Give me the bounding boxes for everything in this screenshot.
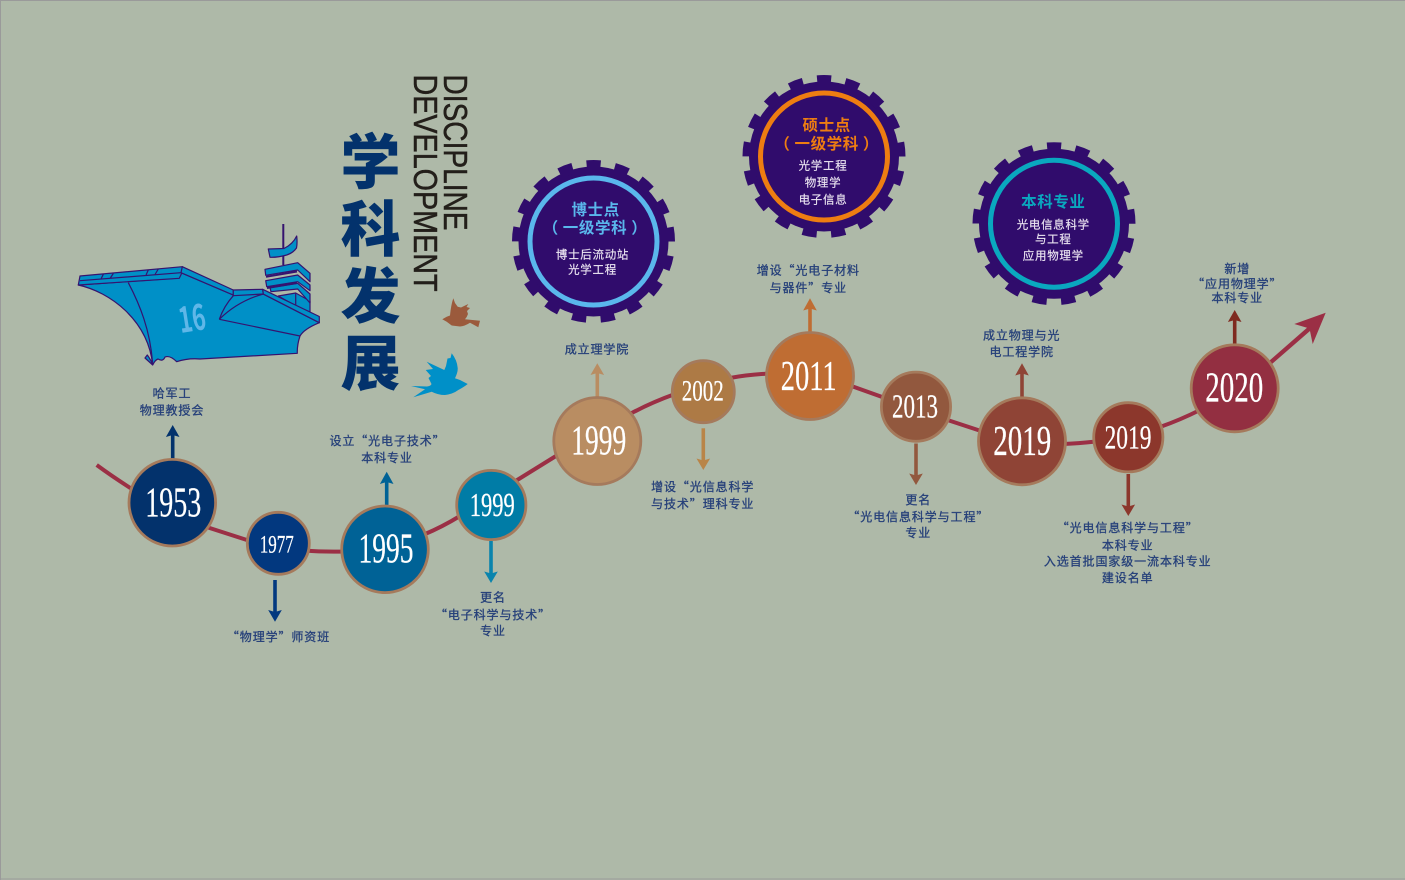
label: 1999 second: 成立理学院 [565,340,629,358]
title: Chinese [340,115,400,403]
arrow: 1995 [380,472,394,506]
title: Chinese: 科 [340,182,400,269]
node: 2002 [672,361,734,423]
label: 1999 [435,588,551,639]
arrow: 1953 [166,425,180,460]
node: 1953: 1953 [145,481,201,527]
gear: master: （ 一级学科 ） [774,132,879,154]
label: 2019 second: 建设名单 [1102,569,1154,586]
label: 2019: 电工程学院 [989,343,1054,360]
icon: blue bird [411,353,468,397]
label: 1999: 更名 [480,588,506,606]
label: 2019 second: “光电信息科学与工程” [1057,519,1199,536]
ship hull [78,273,319,365]
node: 1977 [247,512,309,574]
gear: doctoral: 博士点 [572,198,620,220]
node: 2019: 2019 [993,419,1051,465]
label: 2020 [1192,260,1282,306]
node: 2019 [978,398,1066,485]
label: 1977: “物理学”师资班 [227,628,330,645]
node: 2020: 2020 [1205,366,1263,412]
label: 2019 second: 本科专业 [1102,536,1154,554]
gear: master: 光学工程 [799,158,847,174]
node: 2013: 2013 [892,389,938,426]
ship deck [78,267,182,285]
arrow: 1977 [268,580,282,622]
node: 1999 second: 1999 [571,419,626,465]
label: 1995 [329,432,446,466]
node: 1953 [129,459,216,546]
arrow: 2002 [696,428,710,470]
node: 2020 [1191,345,1278,432]
arrow: 1999 second [590,363,604,397]
label: 2002: 与技术”理科专业 [651,495,754,512]
label: 2013 [847,491,989,541]
gear: doctoral: （ 一级学科 ） [543,216,647,238]
gear: doctoral: 光学工程 [568,262,617,278]
label: 2011: 增设“光电子材料 [757,262,860,278]
title: English line 2: DEVELOPMENT [407,74,444,292]
gear: undergraduate: 光电信息科学 [1017,216,1090,232]
label: 2020: 本科专业 [1211,289,1263,306]
node: 1999: 1999 [470,487,515,524]
node: 2013 [881,372,951,441]
gear: undergraduate: 与工程 [1035,231,1072,247]
label: 2013: 专业 [905,524,931,541]
arrow: 2019 second [1122,474,1135,516]
label: 1995: 本科专业 [361,449,413,466]
ship illustration [78,224,319,365]
title: English line 1: DISCIPLINE [437,74,474,230]
ship tower [265,263,310,312]
arrows [166,298,1241,622]
node: 1995 [342,506,428,593]
gear: master: 电子信息 [799,192,847,208]
label: 2002 [651,478,754,512]
title: Chinese: 发 [340,249,400,336]
node: 2011: 2011 [781,354,837,400]
label: 1999: 专业 [480,622,506,639]
label: 1953 [140,384,204,418]
label: 1999: “电子科学与技术” [435,606,551,623]
arrow: 2019 [1015,363,1029,397]
gear: master: 物理学 [805,174,841,190]
label: 2011: 与器件”专业 [770,279,847,296]
label: 2013: 更名 [905,491,931,508]
arrow: 2011 [803,298,817,332]
hull number: 16 [174,289,209,344]
title: Chinese: 学 [340,115,400,202]
icon: brown bird [442,298,480,327]
label: 2019 second: 入选首批国家级一流本科专业 [1044,552,1212,570]
node: 2019 second: 2019 [1104,420,1152,457]
title: Chinese: 展 [340,316,400,403]
gear: doctoral: 博士后流动站 [556,246,629,262]
label: 1953: 哈军工 [153,384,191,402]
node: 2002: 2002 [682,375,724,408]
gear: master: 硕士点 [803,114,851,136]
final growth arrow [1270,313,1326,364]
gear: master [748,80,900,232]
timeline curve [97,374,1200,552]
label: 2019 second [1044,519,1212,586]
label: 2011 [757,262,860,296]
label: 2020: “应用物理学” [1192,275,1282,292]
label: 2002: 增设“光信息科学 [651,478,754,495]
node: 2011 [766,332,854,420]
arrow: 1999 [484,541,498,583]
node: 1999 second [554,398,641,484]
node: 2019 second [1094,403,1163,472]
ship mast and flag [282,224,284,265]
gear: undergraduate [978,148,1130,300]
label: 2019: 成立物理与光 [983,326,1060,344]
node: 1995: 1995 [358,527,414,573]
label: 1995: 设立“光电子技术” [329,432,446,449]
arrow: 2013 [909,444,923,485]
gear: undergraduate: 应用物理学 [1023,248,1084,264]
arrow: 2020 [1228,310,1242,345]
node: 1977: 1977 [260,532,294,559]
node: 1999 [457,470,526,540]
gear: doctoral [518,166,670,318]
label: 2013: “光电信息科学与工程” [847,508,989,525]
label: 2020: 新增 [1224,260,1250,277]
label: 2019 [983,326,1060,360]
gear: undergraduate: 本科专业 [1021,190,1086,212]
label: 1953: 物理教授会 [140,402,204,418]
